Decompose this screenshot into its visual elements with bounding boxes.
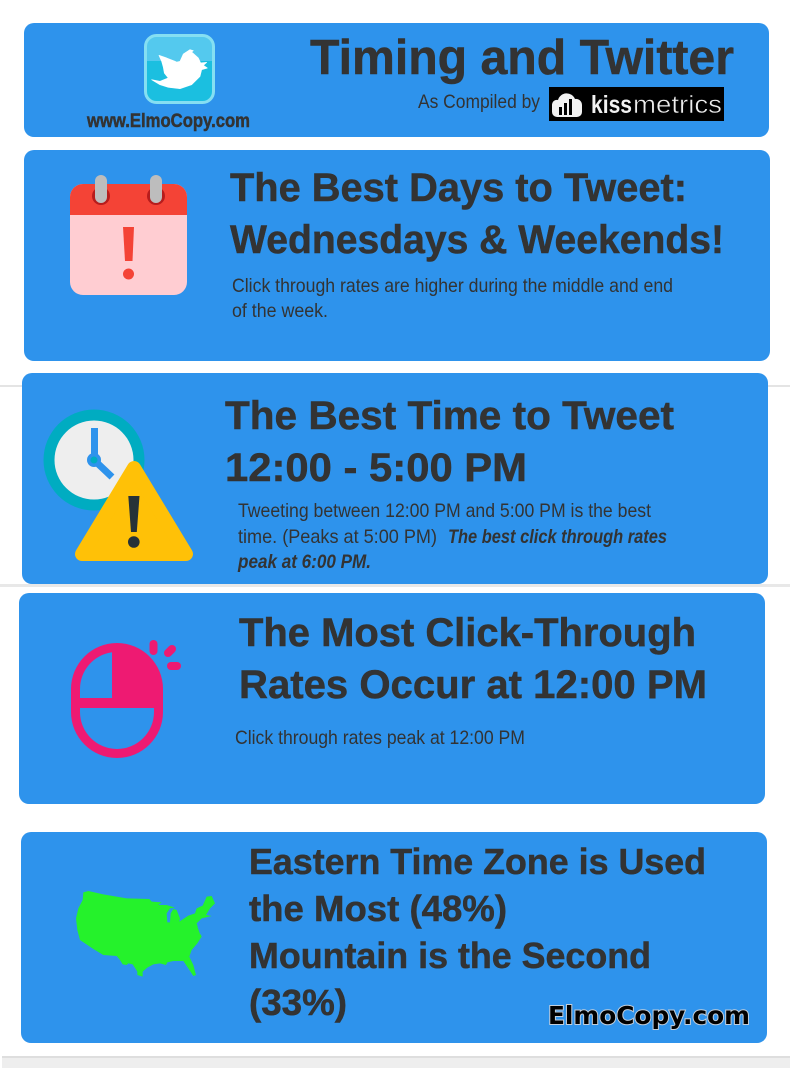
body text: time. (Peaks at 5:00 PM)	[238, 526, 437, 548]
heading	[249, 841, 706, 1023]
heading: The Best Time to Tweet	[225, 394, 674, 438]
icon: clock with warning triangle	[44, 410, 186, 554]
body text: of the week.	[232, 300, 328, 322]
heading: Eastern Time Zone is Used	[249, 841, 706, 882]
icon: twitter bird	[146, 36, 214, 102]
logo: kissmetrics: metrics	[633, 91, 722, 119]
heading: The Best Days to Tweet:	[230, 166, 687, 210]
icon: map of the United States	[76, 891, 215, 977]
watermark: ElmoCopy.com	[548, 1001, 750, 1030]
heading: the Most (48%)	[249, 888, 507, 929]
heading: The Most Click-Through	[239, 611, 696, 655]
body text	[237, 500, 667, 573]
panel: most click-through rates	[19, 593, 765, 804]
panel: best time to tweet	[22, 373, 768, 584]
heading: Wednesdays & Weekends!	[230, 218, 724, 262]
logo: kissmetrics	[549, 87, 724, 121]
body text: Click through rates are higher during the middle and end	[232, 275, 673, 297]
heading: 12:00 - 5:00 PM	[225, 446, 527, 490]
title: Timing and Twitter	[310, 31, 734, 85]
heading	[225, 394, 674, 490]
body text	[232, 275, 673, 322]
logo: kissmetrics: kiss	[591, 91, 632, 119]
heading	[239, 611, 707, 707]
compiled by label: As Compiled by	[418, 91, 540, 113]
heading: (33%)	[249, 982, 347, 1023]
heading: Mountain is the Second	[249, 935, 651, 976]
website label: www.ElmoCopy.com	[86, 111, 250, 132]
body text: The best click through rates	[448, 526, 667, 548]
body text: peak at 6:00 PM.	[237, 551, 371, 573]
icon: calendar with exclamation	[70, 175, 187, 295]
panel: best days to tweet	[24, 150, 770, 361]
body text: Tweeting between 12:00 PM and 5:00 PM is the best	[238, 500, 652, 522]
heading	[230, 166, 724, 262]
panel: header	[24, 23, 769, 137]
panel: time zones	[21, 832, 767, 1043]
body text: Click through rates peak at 12:00 PM	[235, 727, 525, 749]
icon: computer mouse	[71, 643, 177, 758]
heading: Rates Occur at 12:00 PM	[239, 663, 707, 707]
